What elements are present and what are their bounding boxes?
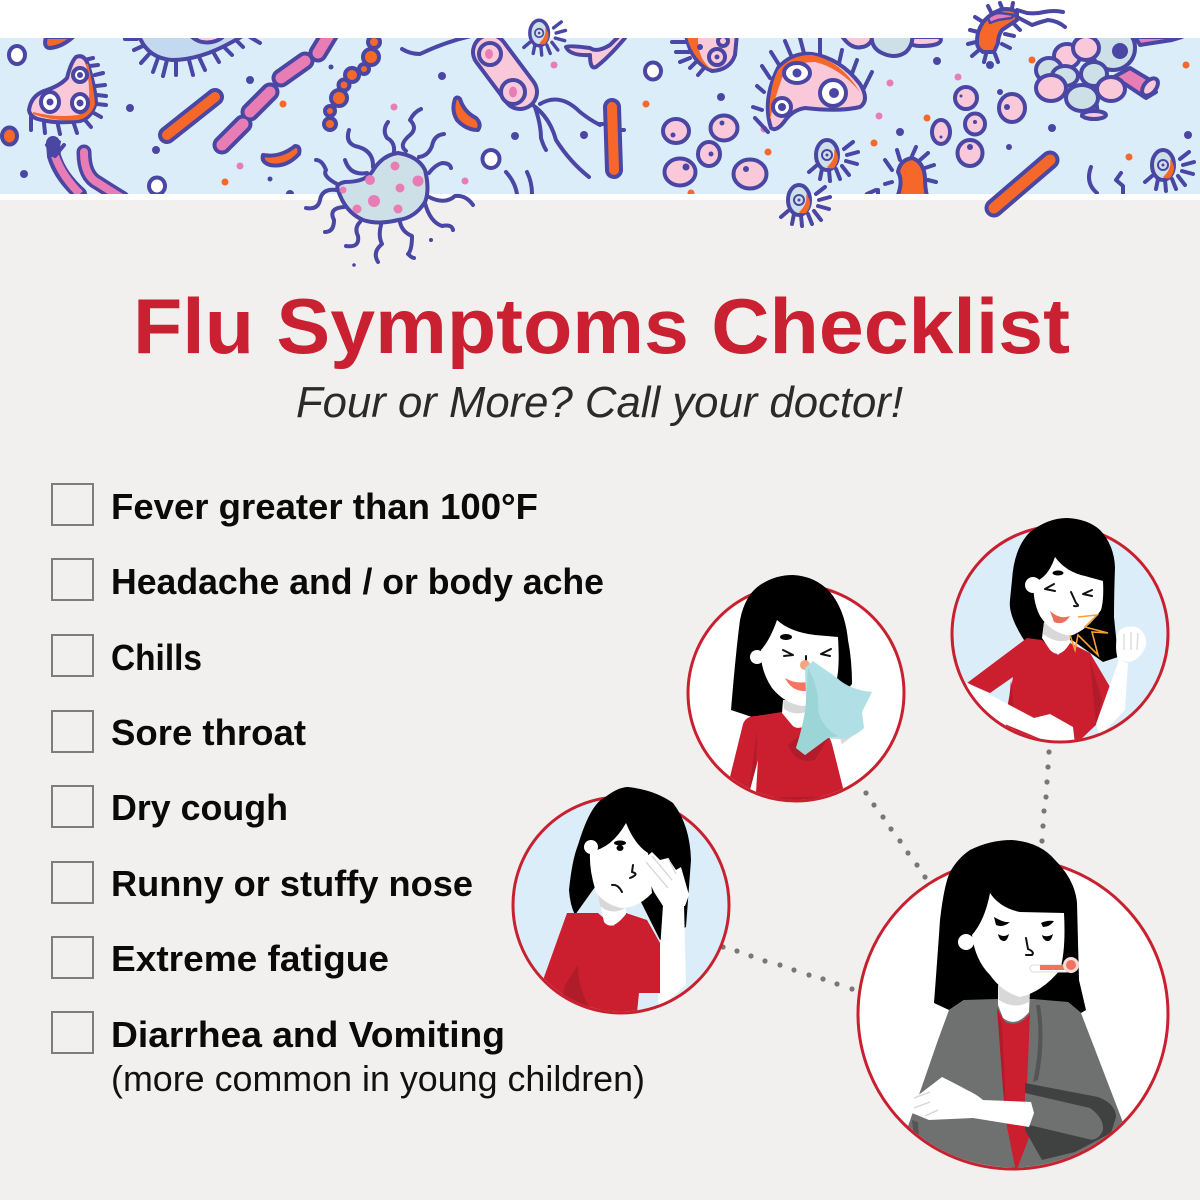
item: chills: Chills <box>111 637 202 678</box>
banner: germs pattern <box>0 3 1200 267</box>
checklist <box>52 484 645 1099</box>
item: sore throat: Sore throat <box>111 712 306 753</box>
figure: woman with headache <box>513 787 729 1013</box>
germ: small eye critter lower <box>781 185 830 226</box>
subtitle: Four or More? Call your doctor! <box>296 378 903 427</box>
dotted connector: cough circle to main figure <box>1039 749 1052 844</box>
germ: small eye critter top <box>524 20 566 55</box>
item: diarrhea and vomiting: Diarrhea and Vomiting <box>111 1014 505 1055</box>
figure: woman coughing <box>952 518 1168 745</box>
dotted connector: nose circle to main figure <box>863 790 928 880</box>
item: dry cough: Dry cough <box>111 787 288 828</box>
title: Flu Symptoms Checklist <box>133 282 1070 370</box>
item: headache: Headache and / or body ache <box>111 561 604 602</box>
figure: woman blowing nose <box>688 575 904 815</box>
item: diarrhea and vomiting: (more common in young children) <box>111 1058 645 1099</box>
figure: woman with fever and thermometer <box>858 840 1168 1180</box>
item: fatigue: Extreme fatigue <box>111 938 389 979</box>
germ: large orange rod <box>994 160 1050 208</box>
item: runny nose: Runny or stuffy nose <box>111 863 473 904</box>
item: fever: Fever greater than 100°F <box>111 486 538 527</box>
top white strip <box>0 0 1200 200</box>
germ: top orange critter with tails <box>968 3 1065 62</box>
dotted connector: headache circle to main figure <box>720 944 855 992</box>
item: diarrhea and vomiting <box>52 1012 645 1099</box>
germ: central spore <box>306 109 473 267</box>
item: chills <box>52 635 202 678</box>
